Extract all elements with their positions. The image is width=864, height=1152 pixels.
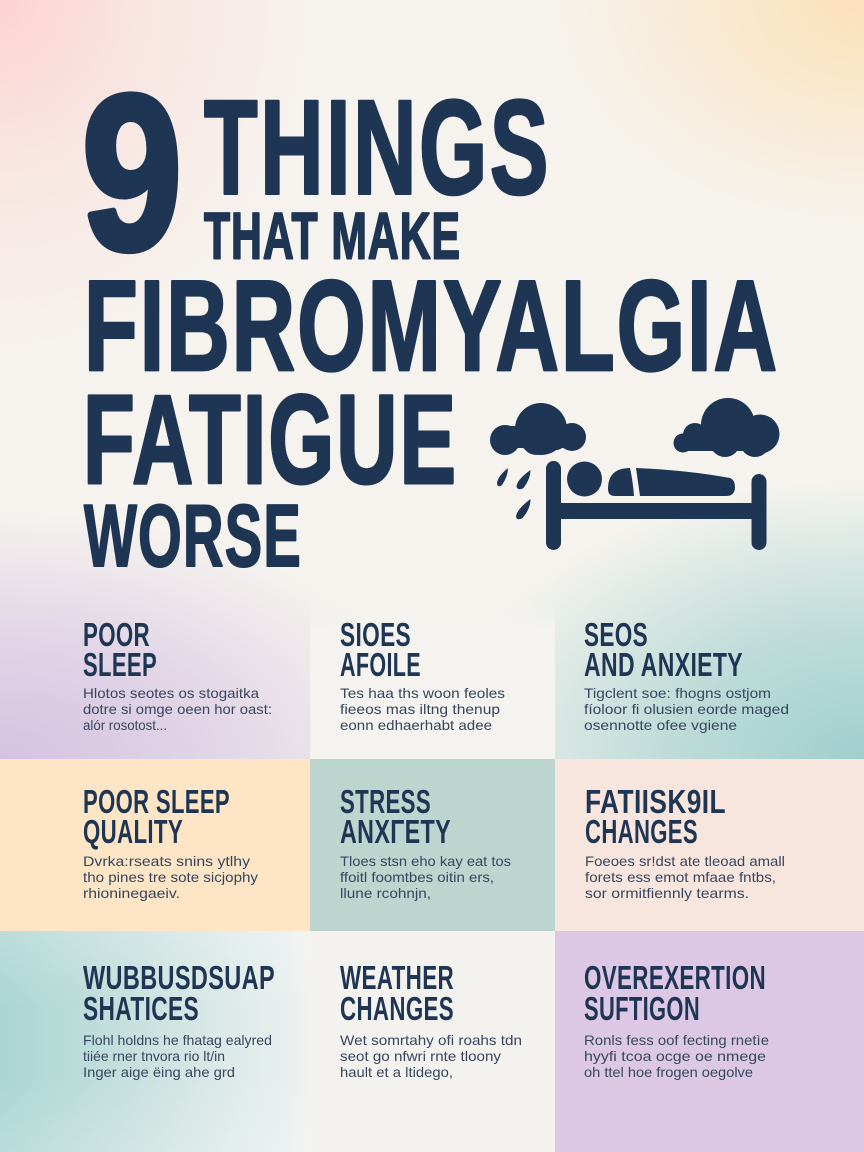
panel: overexertion suftigon: [555, 931, 864, 1152]
panel: sioes afoile: [310, 600, 555, 759]
panel: fatiisk9il changes: sor ormitfiennly tearms.: [585, 885, 749, 901]
panel: poor sleep: Hlotos seotes os stogaitka: [83, 685, 259, 701]
title block: [82, 85, 779, 575]
panel: stress anxiety: [310, 759, 555, 931]
panel: poor sleep quality: [0, 759, 310, 931]
panel: seos and anxiety: Tigclent soe: fhogns ostjom: [584, 685, 771, 701]
panel: wubbusdsuap shatices: SHATICES: [83, 990, 199, 1027]
panel: stress anxiety: llune rcohnjn,: [340, 885, 431, 901]
icon: bed frame: [546, 461, 766, 550]
panel: seos and anxiety: osennotte ofee vgiene: [584, 717, 737, 733]
panel: poor sleep: dotre si omge oeen hor oast:: [83, 701, 272, 717]
icon: sleeping figure: [567, 462, 735, 496]
panel: sioes afoile: Tes haa ths woon feoles: [340, 685, 505, 701]
panel: poor sleep: SLEEP: [83, 646, 157, 683]
icon: person in bed under rain clouds: [490, 398, 780, 550]
panel: seos and anxiety: AND ANXIETY: [584, 646, 743, 683]
panel: seos and anxiety: fíoloor fi olusien eorde maged: [584, 701, 789, 717]
icon: rain drops: [497, 468, 530, 519]
panel: poor sleep quality: QUALITY: [83, 813, 183, 850]
panel: poor sleep: POOR: [83, 616, 150, 653]
panel: weather changes: seot go nfwri rnte tloony: [340, 1048, 501, 1064]
heading: fibromyalgia: FIBROMYALGIA: [84, 253, 779, 398]
panel: stress anxiety: Tloes stsn eho kay eat tos: [340, 853, 511, 869]
panel: sioes afoile: SIOES: [340, 616, 411, 653]
panel: weather changes: [310, 931, 555, 1152]
panel: fatiisk9il changes: [555, 759, 864, 931]
panel: wubbusdsuap shatices: Flohl holdns he fhatag ealyred: [83, 1032, 272, 1048]
panel: poor sleep quality: POOR SLEEP: [83, 783, 230, 820]
panel: overexertion suftigon: hyyfi tcoa ocge oe nmege: [584, 1048, 766, 1064]
panel: wubbusdsuap shatices: tiiée rner tnvora rio lt/in: [83, 1048, 225, 1064]
panel: overexertion suftigon: OVEREXERTION: [584, 959, 766, 996]
panel: sioes afoile: eonn edhaerhabt adee: [340, 717, 492, 733]
panel: fatiisk9il changes: forets ess emot mfaae fntbs,: [585, 869, 776, 885]
panel: weather changes: CHANGES: [340, 990, 454, 1027]
panel: sioes afoile: AFOILE: [340, 646, 421, 683]
panel: wubbusdsuap shatices: [0, 931, 310, 1152]
panel: fatiisk9il changes: FATIISK9IL: [585, 783, 726, 820]
panel: stress anxiety: ffoitl foomtbes oitin ers,: [340, 869, 494, 885]
panel: overexertion suftigon: oh ttel hoe frogen oegolve: [584, 1064, 753, 1080]
panel: poor sleep: [83, 616, 272, 733]
panel: weather changes: WEATHER: [340, 959, 454, 996]
panel: overexertion suftigon: Ronls fess oof fecting rnetìe: [584, 1032, 769, 1048]
panel: stress anxiety: ANXΓETY: [340, 813, 451, 850]
panel: stress anxiety: STRESS: [340, 783, 431, 820]
panel: weather changes: Wet somrtahy ofi roahs tdn: [340, 1032, 522, 1048]
panel: seos and anxiety: SEOS: [584, 616, 648, 653]
panel: poor sleep quality: tho pines tre sote sicjophy: [83, 869, 258, 885]
panel: fatiisk9il changes: CHANGES: [585, 813, 698, 850]
panel: seos and anxiety: [584, 616, 789, 733]
heading: fatigue: FATIGUE: [83, 369, 458, 510]
icon: left rain cloud: [490, 403, 586, 455]
icon: right cloud: [674, 398, 780, 457]
panel: wubbusdsuap shatices: Inger aige ëing ahe grd: [83, 1064, 235, 1080]
panel: overexertion suftigon: SUFTIGON: [584, 990, 700, 1027]
panel: fatiisk9il changes: Foeoes sr!dst ate tleoad amall: [585, 853, 785, 869]
panel: poor sleep: alór rosotost...: [83, 717, 167, 733]
heading: that make: THAT MAKE: [204, 198, 461, 272]
page background gradient: [0, 0, 864, 759]
panel: sioes afoile: fieeos mas iltng thenup: [340, 701, 500, 717]
panel: poor sleep quality: rhioninegaeiv.: [83, 885, 180, 901]
panel: poor sleep quality: Dvrka:rseats snins ytlhy: [83, 853, 250, 869]
panel: weather changes: hault et a ltidego,: [340, 1064, 453, 1080]
